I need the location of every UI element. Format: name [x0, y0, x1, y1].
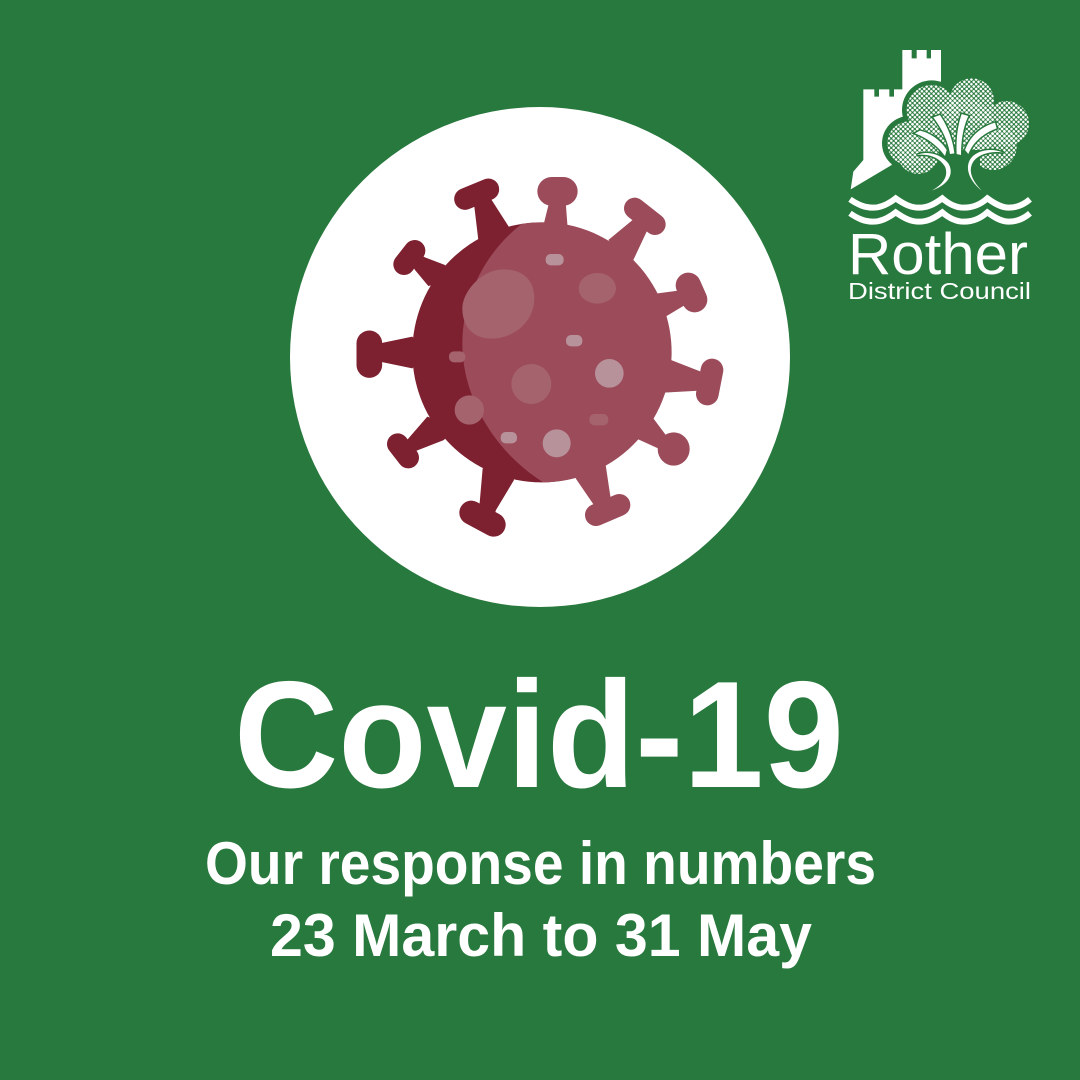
logo icon: castle, tree and river	[850, 50, 1034, 222]
tree canopy	[882, 74, 1034, 179]
white circle with virus illustration	[290, 107, 790, 607]
virus light spikes	[543, 191, 712, 515]
virus surface spots	[449, 254, 624, 457]
title: Covid-19	[234, 650, 844, 820]
subtitle line 2: dates: 23 March to 31 May	[270, 902, 813, 969]
tree trunk and branches	[915, 114, 1003, 195]
castle	[851, 50, 941, 189]
logo wordmark: District Council: District Council	[848, 278, 1031, 304]
virus dark body	[412, 222, 671, 482]
virus dark spikes	[369, 189, 520, 525]
river waves	[850, 198, 1030, 222]
icon: virus	[369, 189, 712, 525]
subtitle line 1: Our response in numbers	[205, 830, 876, 897]
logo wordmark: Rother: Rother	[848, 222, 1028, 287]
logo: Rother District Council	[848, 50, 1034, 304]
virus light side	[462, 222, 672, 482]
